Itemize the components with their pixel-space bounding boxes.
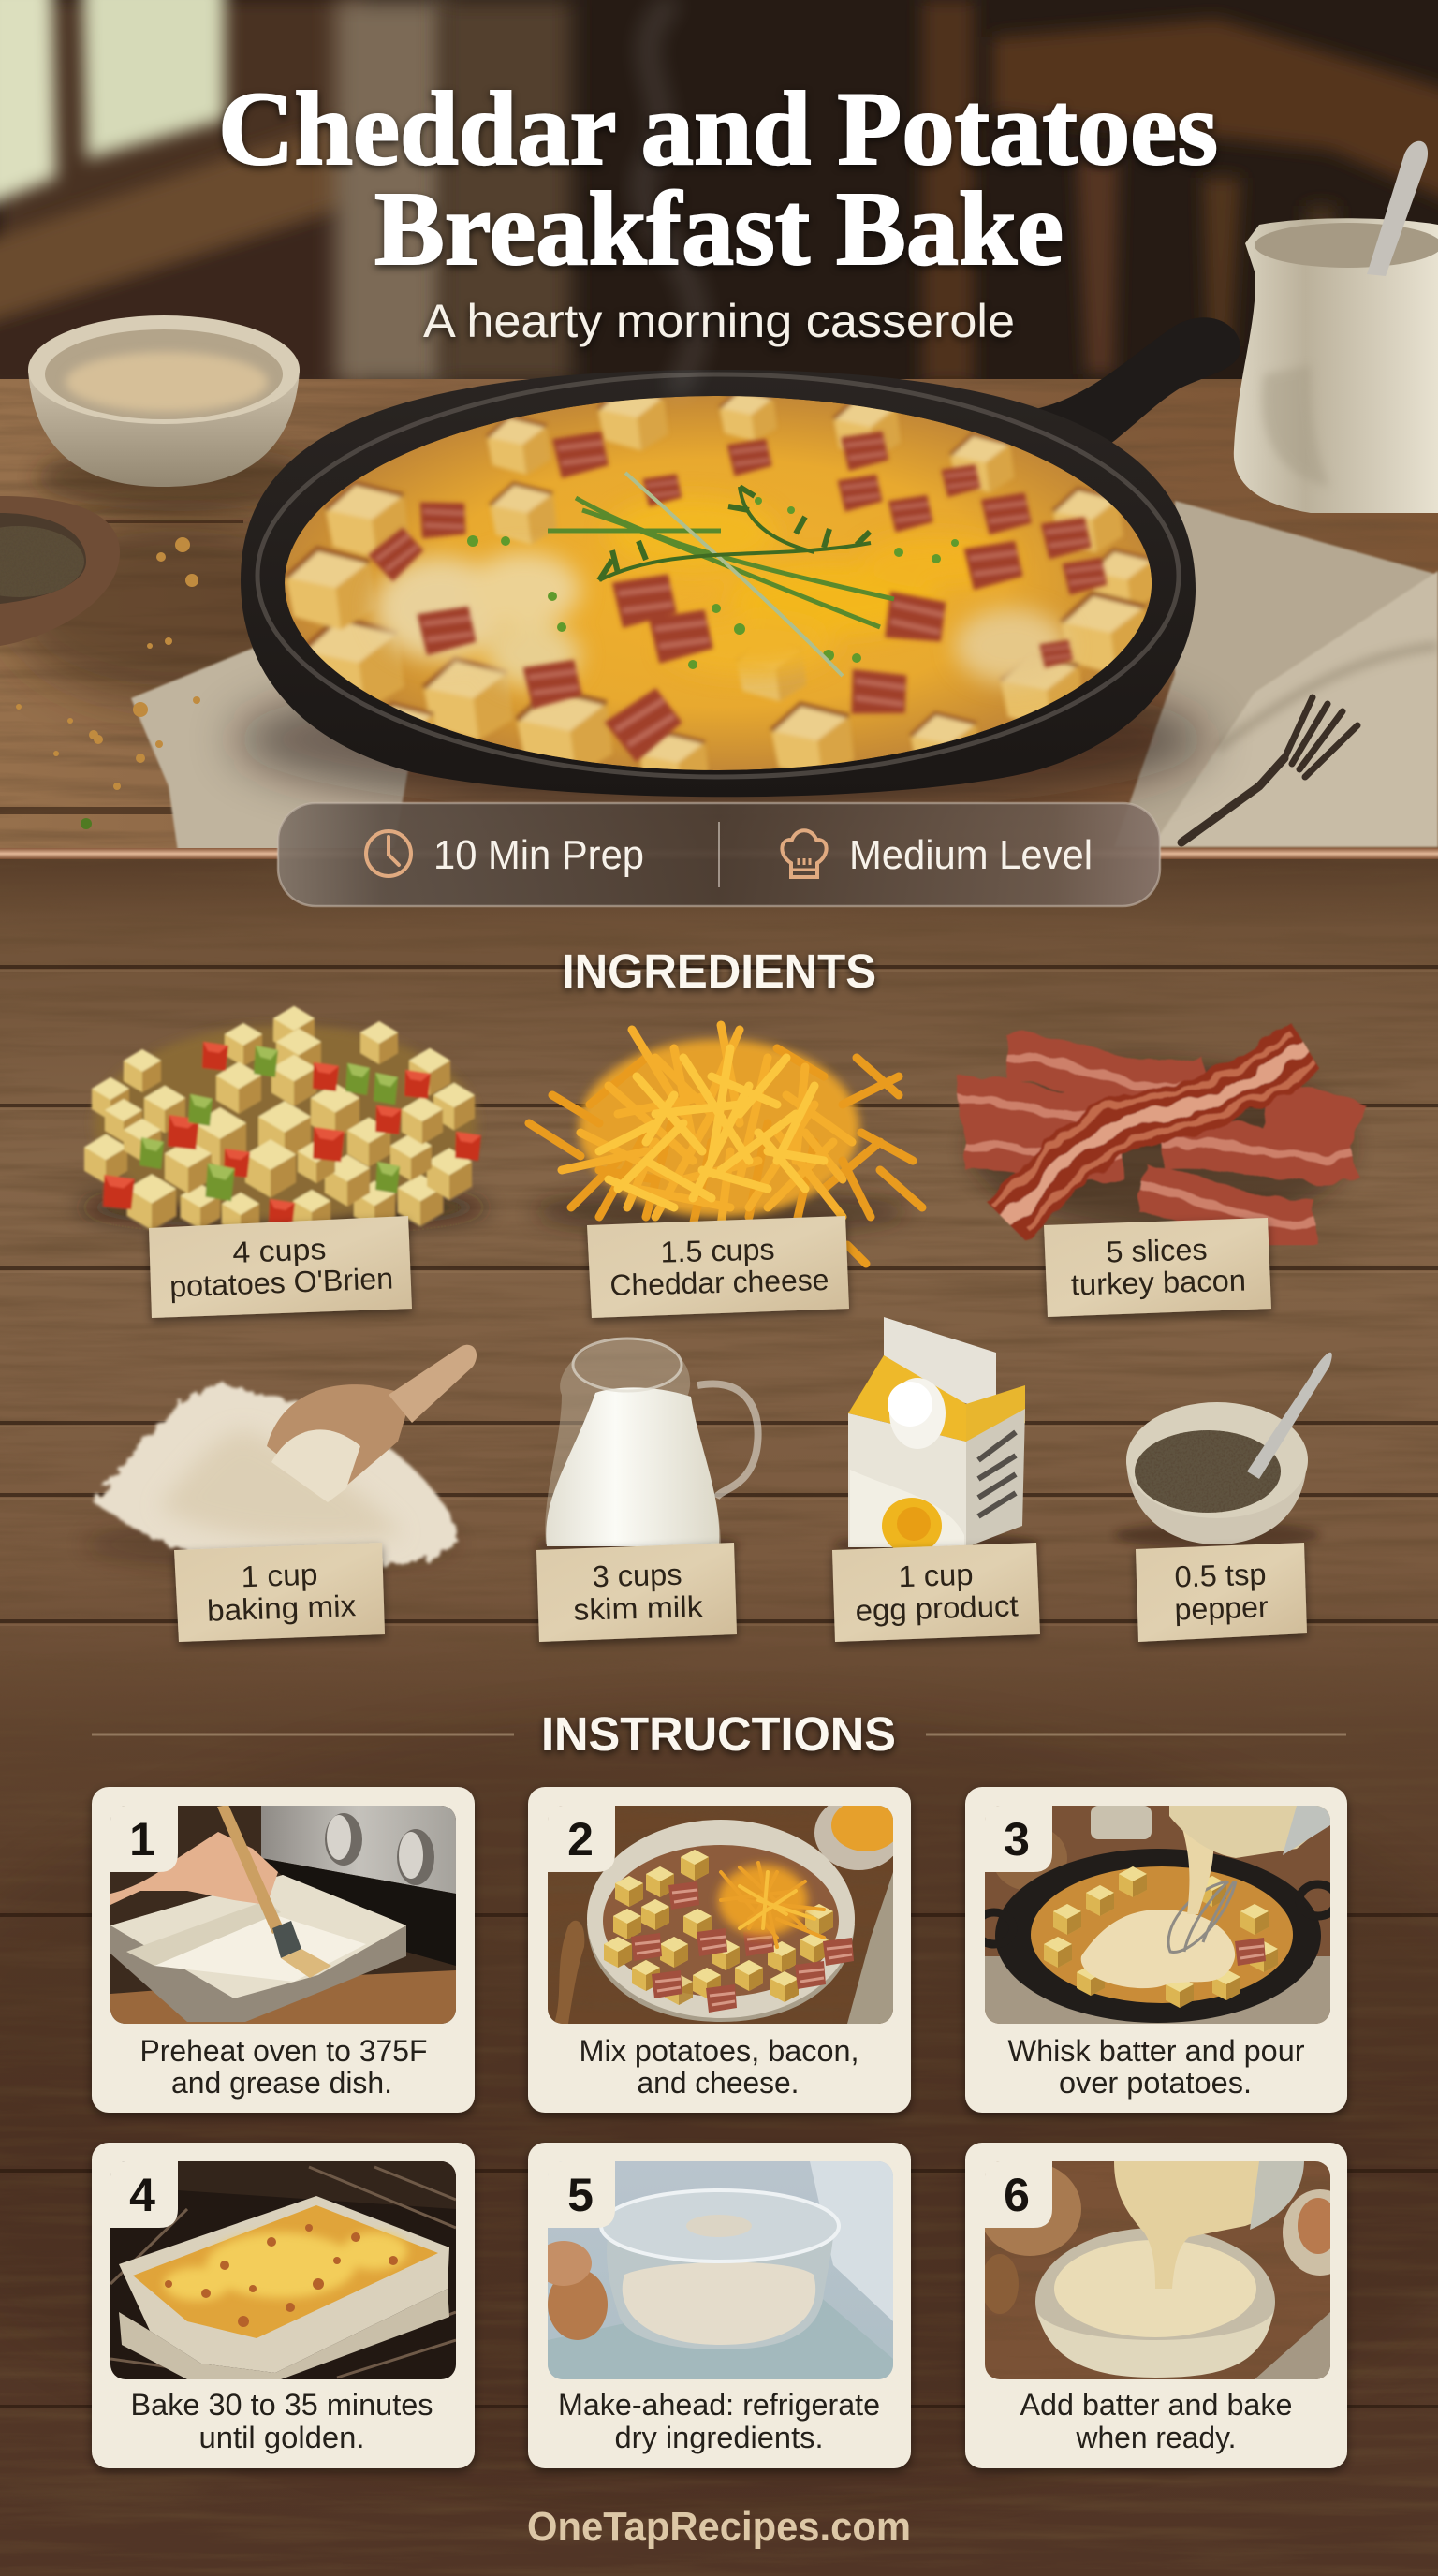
step number: 4 (129, 2169, 155, 2221)
pan body (241, 370, 1196, 797)
label: baking mix: baking mix (207, 1588, 357, 1628)
wood background (0, 824, 1438, 2576)
label: bacon: 5 slices (1106, 1233, 1208, 1268)
step text: when ready. (1076, 2421, 1236, 2454)
ingredient: baking mix (84, 1345, 477, 1569)
label: pepper: pepper (1174, 1589, 1269, 1627)
step text: and grease dish. (171, 2066, 392, 2100)
difficulty: Medium Level (849, 832, 1093, 878)
step 2 image: mixing bowl (548, 1795, 902, 2024)
label: pepper: 0.5 tsp (1174, 1557, 1267, 1594)
herb garnish (548, 473, 894, 676)
step number: 5 (567, 2169, 594, 2221)
label: egg product: egg product (855, 1588, 1019, 1628)
label: skim milk (536, 1543, 737, 1642)
ceramic pitcher (1234, 141, 1438, 513)
step 1 image: greasing dish (110, 1805, 456, 2024)
step 6 image: pouring batter (978, 2161, 1357, 2379)
step 5 card (528, 2143, 911, 2468)
step 2 card (528, 1787, 911, 2113)
ingredient: egg carton (833, 1317, 1039, 1556)
title: Cheddar and Potatoes (218, 71, 1218, 187)
step text: Preheat oven to 375F (140, 2034, 427, 2068)
label: bacon: turkey bacon (1070, 1264, 1246, 1301)
ingredient: ground pepper (1114, 1353, 1332, 1548)
icon: chef hat (782, 830, 827, 877)
step text: Mix potatoes, bacon, (579, 2034, 859, 2068)
icon: clock (366, 831, 411, 876)
label: potatoes (149, 1216, 412, 1318)
step text: until golden. (198, 2421, 365, 2454)
label: pepper (1136, 1543, 1307, 1642)
footer: website: OneTapRecipes.com (527, 2504, 911, 2550)
step number (110, 1806, 178, 1872)
step text: Bake 30 to 35 minutes (131, 2388, 433, 2422)
cast iron skillet (234, 317, 1240, 814)
small bowl of oats (28, 315, 318, 511)
step number (548, 2161, 615, 2228)
crumbs (16, 537, 200, 829)
carton cap (888, 1378, 946, 1449)
step 3 image: whisk batter (976, 1806, 1337, 2024)
ingredient: bacon (960, 1034, 1357, 1231)
label: cheddar (587, 1216, 849, 1318)
step number (985, 1806, 1052, 1872)
step 3 card (965, 1787, 1347, 2113)
label: cheddar: 1.5 cups (660, 1232, 775, 1269)
label: baking mix: 1 cup (241, 1558, 318, 1593)
step text (140, 2034, 427, 2100)
step 4 image: baking in oven (110, 2161, 456, 2379)
title (218, 71, 1218, 287)
casserole (285, 387, 1157, 796)
step text: over potatoes. (1059, 2066, 1252, 2100)
label: egg product: 1 cup (898, 1558, 974, 1593)
label: bacon (1044, 1218, 1271, 1317)
step number: 2 (567, 1813, 594, 1866)
label: potatoes: 4 cups (232, 1232, 327, 1269)
peppercorn dish (0, 496, 120, 646)
prep time: 10 Min Prep (433, 832, 644, 878)
ingredient: potatoes (78, 1006, 490, 1236)
step text: and cheese. (637, 2066, 800, 2100)
label: skim milk: skim milk (573, 1589, 704, 1627)
subtitle: A hearty morning casserole (423, 295, 1015, 347)
step text (558, 2388, 880, 2454)
linen napkin (131, 501, 1438, 852)
label: baking mix (174, 1543, 385, 1642)
label: skim milk: 3 cups (592, 1558, 682, 1593)
hero photograph (0, 0, 1438, 852)
label: egg product (832, 1543, 1040, 1642)
label: potatoes: potatoes O'Brien (169, 1261, 394, 1304)
step text (579, 2034, 859, 2100)
step number (548, 1806, 615, 1872)
step 4 card (92, 2143, 475, 2468)
step number (110, 2161, 178, 2228)
step text: Make-ahead: refrigerate (558, 2388, 880, 2422)
step number (985, 2161, 1052, 2228)
scoop (267, 1345, 477, 1502)
step 1 card (92, 1787, 475, 2113)
step text (1007, 2034, 1305, 2100)
step text (1020, 2388, 1292, 2454)
heading: ingredients: INGREDIENTS (562, 944, 876, 998)
step number: 6 (1004, 2169, 1030, 2221)
fork (1181, 697, 1357, 842)
skillet handle (1020, 317, 1240, 463)
step text: Whisk batter and pour (1007, 2034, 1305, 2068)
step text: dry ingredients. (614, 2421, 824, 2454)
step text: Add batter and bake (1020, 2388, 1292, 2422)
info pill (278, 803, 1160, 906)
step number: 3 (1004, 1813, 1030, 1866)
room backdrop (0, 0, 1438, 402)
heading: instructions: INSTRUCTIONS (541, 1707, 896, 1761)
step text (131, 2388, 433, 2454)
label: cheddar: Cheddar cheese (609, 1263, 829, 1302)
steam (642, 0, 697, 393)
ingredient: cheddar (529, 1025, 922, 1264)
ingredient: skim milk (534, 1339, 758, 1556)
step 6 card (965, 2143, 1357, 2468)
step 5 image: refrigerated bowl (536, 2161, 893, 2379)
wooden table (0, 379, 1438, 852)
copper divider bar (0, 848, 1438, 859)
step number: 1 (129, 1813, 155, 1866)
title: Breakfast Bake (374, 171, 1064, 287)
